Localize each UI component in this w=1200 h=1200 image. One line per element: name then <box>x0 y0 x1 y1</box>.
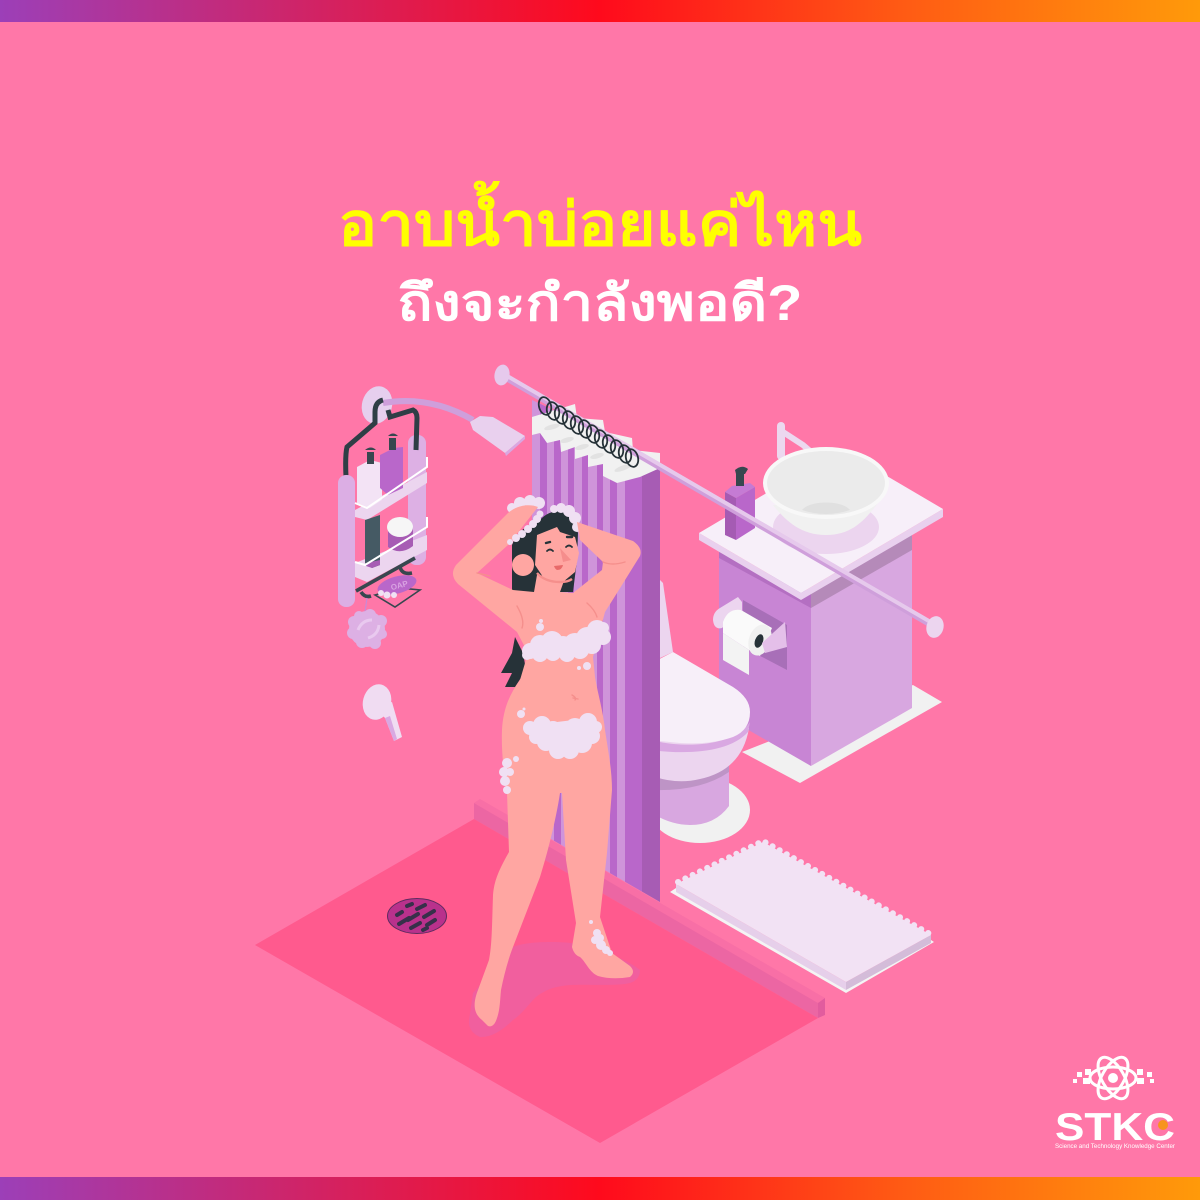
shower floor <box>255 799 825 1143</box>
thigh foam <box>499 756 519 794</box>
logo wordmark: STKC <box>1055 1106 1175 1149</box>
curtain top flaps <box>532 404 660 483</box>
floor drain <box>388 898 446 934</box>
lower shelf rail <box>355 517 427 565</box>
bath mat <box>670 841 934 993</box>
shower valve <box>359 681 402 741</box>
soap <box>375 572 420 607</box>
woman's floor shadow <box>469 942 640 1037</box>
foot foam <box>589 920 613 956</box>
hair back <box>501 511 578 687</box>
soap: OAP <box>390 579 410 592</box>
toilet paper holder <box>713 597 787 675</box>
body <box>453 505 641 1026</box>
title: อาบน้ำบ่อยแค่ไหน <box>338 180 862 258</box>
shower head and pipe <box>358 383 525 456</box>
STKC logo <box>1055 1053 1176 1150</box>
countertop <box>699 449 943 600</box>
logo atom mark <box>1090 1053 1136 1103</box>
soap dispenser <box>725 467 755 540</box>
foam on hair <box>507 495 582 532</box>
shower caddy <box>338 400 427 649</box>
loofah sponge <box>347 598 387 649</box>
flap shadows <box>544 423 632 473</box>
body shading <box>477 562 625 700</box>
lower shelf <box>355 535 427 582</box>
vanity cabinet <box>719 533 942 783</box>
upper shelf rail <box>355 457 427 508</box>
belly foam <box>517 708 602 759</box>
caddy hanger <box>346 400 417 477</box>
curtain rings <box>537 396 640 468</box>
foam on hand <box>507 510 544 545</box>
top gradient bar <box>0 0 1200 22</box>
shower curtain <box>532 400 660 910</box>
logo tagline: Science and Technology Knowledge Center <box>1055 1143 1176 1150</box>
woman <box>453 495 641 1026</box>
title <box>338 180 862 331</box>
dark tube <box>365 515 380 568</box>
logo pixel squares <box>1073 1069 1154 1084</box>
curtain rod <box>493 363 946 640</box>
caddy right rail <box>408 435 426 565</box>
logo orange dot <box>1158 1120 1168 1130</box>
head <box>512 527 579 582</box>
title: ถึงจะกำลังพอดี? <box>398 275 802 331</box>
white bottle <box>357 448 382 508</box>
chest foam <box>522 619 611 670</box>
hook bar <box>356 558 415 596</box>
toilet <box>650 580 750 843</box>
upper shelf <box>355 472 427 520</box>
caddy left rail <box>338 475 355 607</box>
jar <box>387 517 413 551</box>
purple bottle <box>380 434 403 495</box>
sink basin <box>763 422 889 554</box>
bottom gradient bar <box>0 1177 1200 1200</box>
